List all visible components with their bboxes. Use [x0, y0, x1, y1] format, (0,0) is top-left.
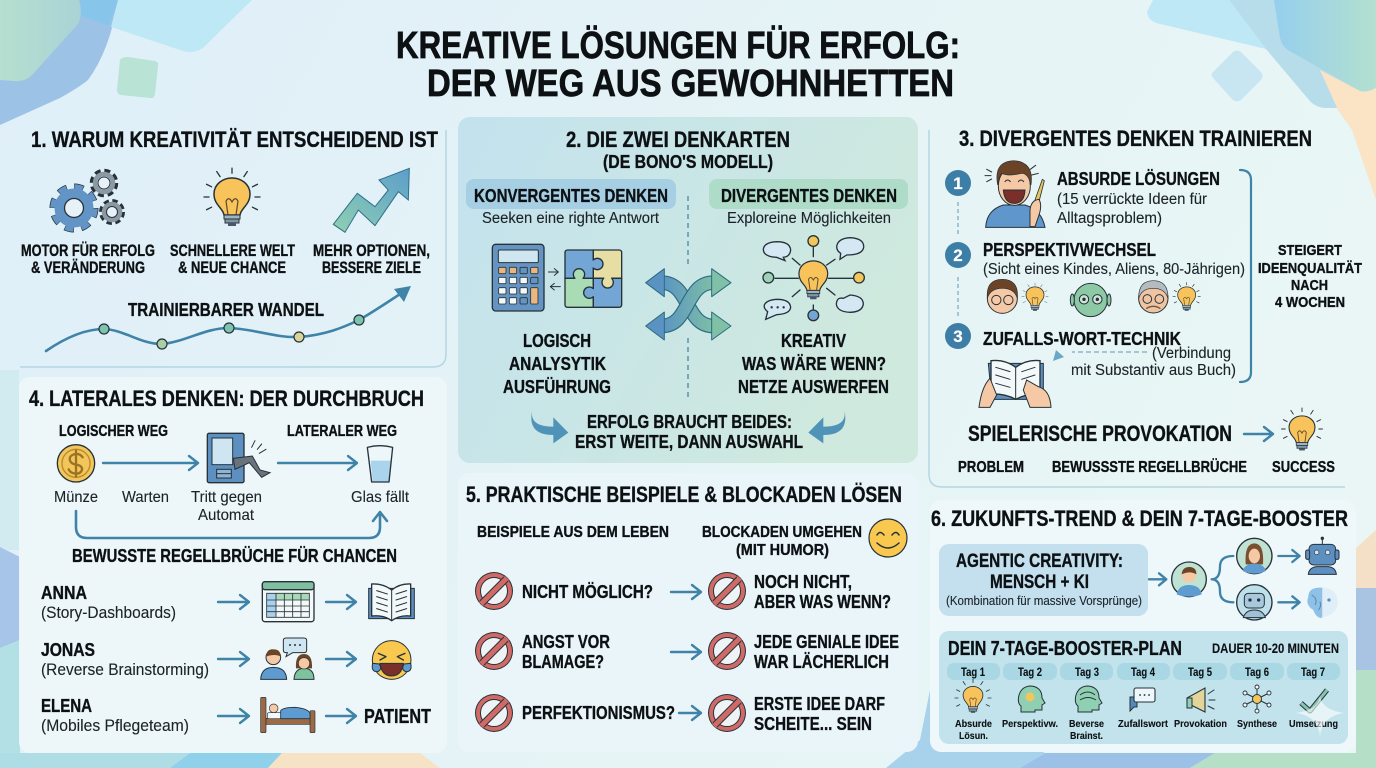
example: Elena: PATIENT	[364, 706, 431, 728]
provocation row: SPIELERISCHE PROVOKATION	[968, 421, 1232, 446]
column: konvergent header: KONVERGENTES DENKEN	[474, 185, 668, 206]
label: Motor: & VERÄNDERUNG	[31, 258, 145, 277]
provocation row: SUCCESS	[1272, 459, 1335, 476]
provocation row: PROBLEM	[958, 459, 1024, 476]
callout: agentic creativity: MENSCH + KI	[990, 572, 1089, 593]
label: Schnellere Welt: & NEUE CHANCE	[178, 258, 286, 277]
labels: steps: Automat	[198, 507, 255, 524]
arrow: machine to glass	[278, 456, 357, 470]
row 2: ANGST VOR	[522, 631, 610, 652]
panel 5: Beispiele und Blockaden	[458, 473, 918, 752]
heading 4: 4. LATERALES DENKEN: DER DURCHBRUCH	[29, 386, 424, 411]
panel 3: divergentes Denken trainieren	[929, 126, 1362, 487]
day 7: Tag 7	[1301, 667, 1325, 679]
text: kreativ: KREATIV	[781, 331, 846, 351]
label: Motor: MOTOR FÜR ERFOLG	[21, 241, 155, 260]
day 5: Tag 5	[1188, 667, 1212, 679]
column label left: BEISPIELE AUS DEM LEBEN	[477, 524, 669, 541]
day 6: Synthese	[1237, 718, 1277, 730]
panel: 7-day booster plan: DAUER 10-20 MINUTEN	[1212, 640, 1339, 656]
step 2: PERSPEKTIVWECHSEL	[983, 239, 1156, 260]
example: Anna: ANNA	[41, 582, 87, 603]
example: Elena: ELENA	[41, 695, 92, 716]
day 1: Absurde	[955, 718, 992, 730]
day 3: Brainst.	[1070, 730, 1103, 742]
step 1: (15 verrückte Ideen für	[1057, 191, 1207, 208]
diagram: human plus AI	[1149, 537, 1339, 620]
step 3	[945, 323, 1236, 407]
text: logisch	[503, 331, 611, 397]
labels: steps: Tritt gegen	[191, 489, 262, 506]
title: DER WEG AUS GEWOHNHETTEN	[427, 63, 954, 105]
row 2: BLAMAGE?	[522, 651, 604, 672]
step 1: ABSURDE LÖSUNGEN	[1057, 168, 1220, 189]
day 7: Umsetzung	[1289, 718, 1338, 730]
arrow: coin to machine	[103, 456, 198, 470]
panel 6: Zukunftstrend und Booster	[930, 500, 1356, 752]
row 1	[475, 571, 891, 612]
provocation row: BEWUSSSTE REGELLBRÜCHE	[1052, 459, 1247, 476]
day 5: Provokation	[1174, 718, 1227, 730]
day 5	[1173, 663, 1227, 730]
label: Motor	[21, 241, 155, 277]
step 3: mit Substantiv aus Buch)	[1071, 362, 1236, 379]
day 3	[1060, 663, 1113, 742]
column: konvergent header: Seeken eine righte Antwort	[482, 210, 660, 227]
icon: smiley	[869, 519, 907, 557]
example: Anna	[41, 582, 414, 622]
icon: crossing arrows	[646, 269, 731, 340]
step 2: 2	[953, 246, 963, 265]
label: Mehr Optionen	[313, 241, 430, 277]
callout: Ideenqualität	[1258, 242, 1362, 311]
label: Mehr Optionen: BESSERE ZIELE	[322, 258, 421, 277]
labels: steps: Glas fällt	[351, 489, 410, 506]
row 2: WAR LÄCHERLICH	[754, 651, 889, 672]
example: Jonas	[41, 638, 411, 679]
day 6	[1230, 663, 1284, 730]
callout: Ideenqualität: NACH	[1291, 277, 1328, 294]
example: Elena	[41, 695, 431, 735]
label: Schnellere Welt: SCHNELLERE WELT	[170, 241, 295, 260]
row 3: SCHEITE... SEIN	[754, 713, 872, 734]
day 6: Tag 6	[1245, 667, 1269, 679]
callout: agentic creativity: (Kombination für massive Vorsprünge)	[946, 594, 1142, 608]
conclusion with arrows	[531, 410, 845, 452]
day 1	[947, 663, 1000, 742]
step 2	[945, 239, 1245, 317]
labels: steps	[54, 489, 410, 524]
label: trainierbarer Wandel: TRAINIERBARER WANDEL	[128, 300, 324, 320]
bracket	[1240, 170, 1251, 382]
icon: idea network	[763, 236, 864, 321]
row 3	[475, 693, 885, 734]
step 1	[945, 161, 1220, 227]
column label right: BLOCKADEN UMGEHEN	[702, 524, 862, 541]
row 1: NICHT MÖGLICH?	[522, 581, 653, 602]
column label right: (MIT HUMOR)	[736, 542, 829, 559]
heading 2	[566, 127, 790, 172]
example: Jonas: JONAS	[41, 639, 95, 660]
example: Jonas: (Reverse Brainstorming)	[41, 661, 209, 679]
column: divergent header	[709, 179, 908, 227]
step 3: 3	[953, 327, 963, 346]
title: KREATIVE LÖSUNGEN FÜR ERFOLG:	[396, 24, 960, 67]
day 7	[1287, 663, 1344, 736]
text: kreativ: NETZE AUSWERFEN	[738, 377, 889, 397]
icons: three perspectives	[987, 279, 1200, 317]
text: logisch: ANALYSYTIK	[509, 354, 606, 374]
label: bewusste Regelbrüche: BEWUSSTE REGELLBRÜCHE FÜR CHANCEN	[72, 545, 397, 566]
day 1: Lösun.	[959, 730, 988, 742]
row 2: JEDE GENIALE IDEE	[754, 631, 899, 652]
panel 1: warum Kreativität	[20, 127, 446, 367]
row 3: ERSTE IDEE DARF	[754, 693, 885, 714]
day 2: Perspektivw.	[1002, 718, 1058, 730]
example: Elena: (Mobiles Pflegeteam)	[41, 717, 189, 735]
label: lateraler Weg: LATERALER WEG	[287, 423, 397, 440]
panel: 7-day booster plan	[939, 631, 1348, 744]
icon: glass	[367, 446, 393, 482]
title	[396, 24, 960, 105]
heading 5: 5. PRAKTISCHE BEISPIELE & BLOCKADEN LÖSEN	[466, 482, 902, 507]
column: divergent header: DIVERGENTES DENKEN	[721, 185, 897, 206]
panel 2: die zwei Denkarten	[458, 117, 918, 463]
day 4: Tag 4	[1131, 667, 1155, 679]
icon: lightbulb	[204, 168, 260, 226]
label: Mehr Optionen: MEHR OPTIONEN,	[313, 241, 430, 260]
heading 2: (DE BONO'S MODELL)	[603, 152, 773, 172]
text: logisch: LOGISCH	[523, 331, 591, 351]
labels: steps: Warten	[122, 489, 169, 506]
day 2: Tag 2	[1018, 667, 1042, 679]
column label right	[702, 524, 862, 559]
chart: wave arrow	[46, 286, 411, 351]
row 1: NOCH NICHT,	[754, 571, 852, 592]
icon: calculator and puzzle	[492, 244, 622, 311]
conclusion with arrows: ERFOLG BRAUCHT BEIDES:	[587, 412, 792, 432]
callout: agentic creativity: AGENTIC CREATIVITY:	[956, 551, 1123, 572]
text: logisch: AUSFÜHRUNG	[503, 377, 611, 397]
icon: vending machine with kick	[207, 433, 270, 483]
day 3: Tag 3	[1075, 667, 1099, 679]
heading 1: 1. WARUM KREATIVITÄT ENTSCHEIDEND IST	[31, 127, 438, 152]
day 1: Tag 1	[961, 667, 985, 679]
callout: Ideenqualität: 4 WOCHEN	[1275, 294, 1345, 311]
label: logischer Weg: LOGISCHER WEG	[59, 423, 168, 440]
provocation row	[958, 408, 1335, 476]
text: kreativ	[738, 331, 889, 397]
icon: rising arrow	[333, 168, 409, 232]
step 1: 1	[953, 174, 963, 193]
step 1: Alltagsproblem)	[1057, 210, 1162, 227]
step 2: (Sicht eines Kindes, Aliens, 80-Jährigen)	[983, 261, 1245, 278]
icon: gears	[54, 172, 122, 228]
heading 2: 2. DIE ZWEI DENKARTEN	[566, 127, 790, 152]
arrow: shortcut from coin to glass	[76, 511, 387, 538]
column: divergent header: Exploreine Möglichkeiten	[727, 210, 891, 227]
text: kreativ: WAS WÄRE WENN?	[742, 354, 886, 374]
panel: 7-day booster plan: DEIN 7-TAGE-BOOSTER-PLAN	[948, 638, 1182, 660]
label: Schnellere Welt	[170, 241, 295, 277]
icon: book with hands	[979, 360, 1051, 407]
conclusion with arrows: ERST WEITE, DANN AUSWAHL	[575, 432, 803, 452]
step 3: (Verbindung	[1152, 345, 1231, 362]
row 1: ABER WAS WENN?	[754, 591, 891, 612]
callout: agentic creativity	[939, 544, 1148, 616]
day 2	[1002, 663, 1058, 730]
day 3: Beverse	[1069, 718, 1104, 730]
callout: Ideenqualität: STEIGERT	[1278, 242, 1342, 259]
panel 4: laterales Denken	[19, 377, 447, 753]
row 3: PERFEKTIONISMUS?	[522, 702, 675, 723]
example: Anna: (Story-Dashboards)	[41, 604, 176, 622]
row 2	[475, 631, 899, 672]
labels: steps: Münze	[54, 489, 98, 506]
column: konvergent header	[466, 179, 676, 227]
day 4	[1117, 663, 1170, 730]
icon: coin	[57, 445, 95, 482]
step 3: ZUFALLS-WORT-TECHNIK	[983, 328, 1182, 349]
day 4: Zufallswort	[1118, 718, 1168, 730]
